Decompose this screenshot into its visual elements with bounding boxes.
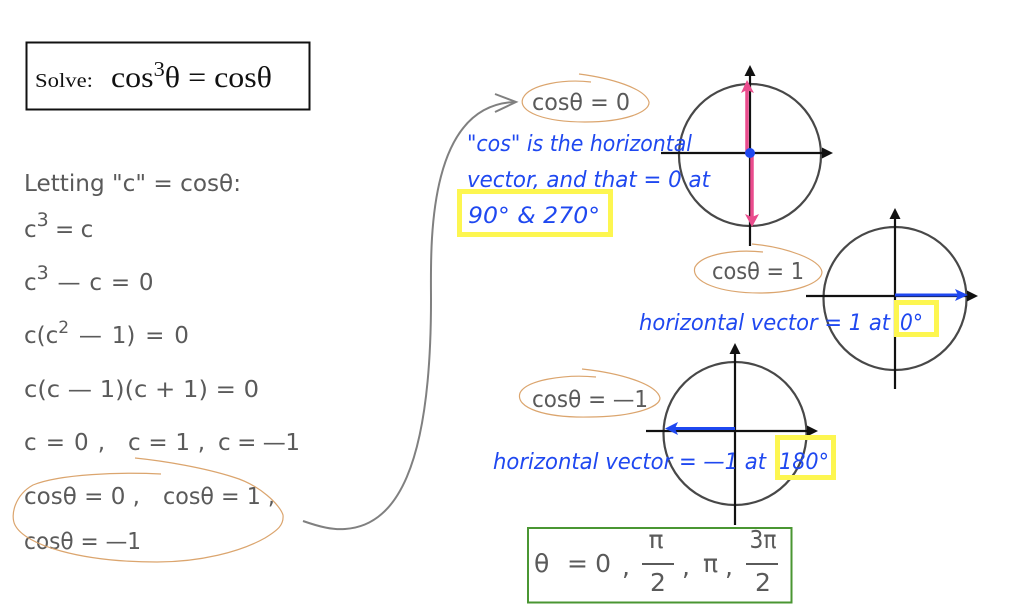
explanation: cos is horizontal vector: "cos" is the horizontal xyxy=(467,131,693,157)
callout: cos theta = 1 xyxy=(694,244,822,293)
highlight: 0 degrees xyxy=(896,302,936,336)
answer: pi over 2 xyxy=(642,525,674,597)
title box: Solve: xyxy=(35,70,93,92)
title box: cos xyxy=(111,61,151,94)
pink vectors at 90 and 270 degrees xyxy=(741,80,759,227)
answer: theta = 0 xyxy=(534,549,630,581)
answer: pi over 2: π xyxy=(648,525,664,554)
answer: theta = 0: , xyxy=(622,552,630,581)
explanation: cos is horizontal vector: vector, and that = 0 at xyxy=(467,167,711,193)
highlight: 180 degrees: 180° xyxy=(779,449,829,475)
blue vector at 0 degrees xyxy=(895,294,960,296)
highlight: 90 and 270 degrees xyxy=(460,192,610,234)
unit circle: cos = 1 xyxy=(806,208,978,389)
step: roots in cos, second line: cosθ = —1 xyxy=(24,529,141,555)
unit circle: cos = 0 xyxy=(661,65,833,246)
step: roots in cos, first line: cosθ = 0 , xyxy=(24,484,140,510)
title box: 3 xyxy=(154,57,165,81)
answer: theta = 0: = 0 xyxy=(567,549,611,578)
step: c cubed minus c: — c = 0 xyxy=(49,270,154,296)
answer box xyxy=(528,525,792,602)
callout: cos theta = 0: cosθ = 0 xyxy=(532,90,630,116)
left column: algebra steps xyxy=(24,171,300,555)
title box xyxy=(26,42,310,110)
highlight: 90 and 270 degrees: 90° & 270° xyxy=(468,203,600,229)
answer: comma, pi, comma: π xyxy=(703,549,718,578)
callout: cos theta = 1: cosθ = 1 xyxy=(712,259,804,285)
explanation: horizontal vector = 1 at 0 degrees: horizontal vector = 1 at xyxy=(639,310,891,336)
step: factor fully: c(c — 1)(c + 1) = 0 xyxy=(24,377,259,403)
step: roots in cos, first line xyxy=(24,484,275,510)
step: roots in cos, first line: cosθ = 1 , xyxy=(163,484,275,510)
answer: comma, pi, comma: , xyxy=(682,552,690,581)
step: c cubed minus c: c xyxy=(24,270,37,296)
highlight: 180 degrees xyxy=(778,438,834,478)
title box: θ = cosθ xyxy=(165,61,272,94)
step: factor c: c(c xyxy=(24,323,58,349)
answer: comma, pi, comma xyxy=(682,549,733,581)
explanation: cos is horizontal vector xyxy=(467,131,711,193)
step: factor c: — 1) = 0 xyxy=(69,323,189,349)
answer: 3 pi over 2 xyxy=(746,525,778,597)
blue vector at 180 degrees xyxy=(673,427,735,430)
answer: 3 pi over 2: 3π xyxy=(750,525,776,554)
callout: cos theta = -1: cosθ = —1 xyxy=(532,387,648,413)
answer: comma, pi, comma: , xyxy=(725,552,733,581)
step: factor c: 2 xyxy=(58,318,69,338)
callout: cos theta = 0 xyxy=(522,74,649,122)
step: roots in c: c = 0 , xyxy=(24,430,105,456)
unit circle: cos = -1 xyxy=(646,343,818,525)
answer: theta = 0: θ xyxy=(534,549,549,578)
explanation: horizontal vector = -1 at 180 degrees: horizontal vector = —1 at xyxy=(493,449,767,475)
hand-drawn ellipse around cos roots xyxy=(13,458,283,562)
step: c cubed minus c: 3 xyxy=(37,262,49,284)
callout: cos theta = -1 xyxy=(519,369,660,417)
blue origin dot xyxy=(745,148,755,158)
step: substitution: Letting "c" = cosθ: xyxy=(24,171,241,197)
step: c cubed equals c: 3 xyxy=(37,209,49,231)
step: c cubed equals c: c xyxy=(24,217,37,243)
answer: 3 pi over 2: 2 xyxy=(755,568,771,597)
highlight: 0 degrees: 0° xyxy=(900,310,923,336)
step: roots in c xyxy=(24,430,300,456)
answer: pi over 2: 2 xyxy=(650,568,666,597)
step: roots in c: c = —1 xyxy=(218,430,300,456)
curved arrow to first case xyxy=(303,94,516,529)
step: roots in c: c = 1 , xyxy=(128,430,205,456)
step: c cubed equals c: = c xyxy=(49,217,93,243)
